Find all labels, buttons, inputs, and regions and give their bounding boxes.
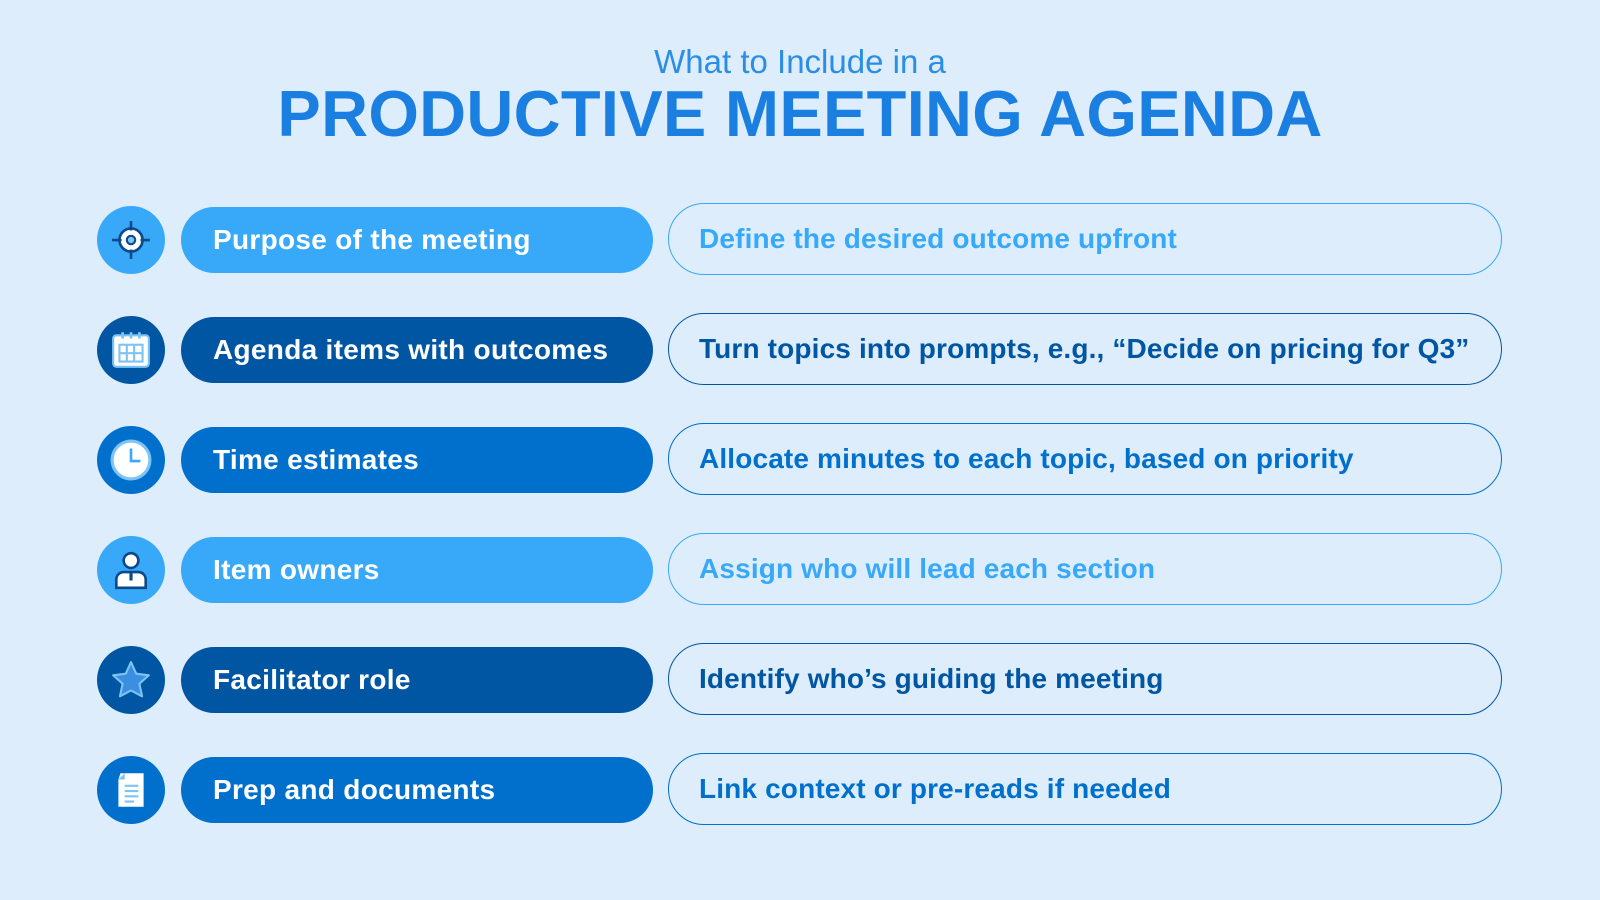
label pill <box>181 317 653 383</box>
label pill <box>181 757 653 823</box>
description pill: Turn topics into prompts, e.g., “Decide on pricing for Q3” <box>699 333 1469 364</box>
description pill <box>668 643 1502 715</box>
subtitle: What to Include in a <box>654 43 946 80</box>
icon: target <box>97 206 165 274</box>
description pill <box>668 203 1502 275</box>
description pill: Allocate minutes to each topic, based on priority <box>699 443 1354 474</box>
title: PRODUCTIVE MEETING AGENDA <box>277 77 1323 150</box>
icon: person <box>97 536 165 604</box>
icon: clock <box>97 426 165 494</box>
icon: document <box>97 756 165 824</box>
row: facilitator <box>97 643 1502 715</box>
label pill: Facilitator role <box>213 664 411 695</box>
description pill <box>668 753 1502 825</box>
description pill <box>668 423 1502 495</box>
label pill <box>181 647 653 713</box>
description pill <box>668 313 1502 385</box>
row: prep <box>97 753 1502 825</box>
description pill: Define the desired outcome upfront <box>699 223 1177 254</box>
label pill: Agenda items with outcomes <box>213 334 608 365</box>
icon: star <box>97 646 165 714</box>
description pill: Link context or pre-reads if needed <box>699 773 1171 804</box>
row: time <box>97 423 1502 495</box>
label pill: Prep and documents <box>213 774 495 805</box>
icon: calendar <box>97 316 165 384</box>
label pill <box>181 427 653 493</box>
label pill: Item owners <box>213 554 380 585</box>
label pill: Purpose of the meeting <box>213 224 531 255</box>
row: purpose <box>97 203 1502 275</box>
label pill <box>181 207 653 273</box>
description pill <box>668 533 1502 605</box>
description pill: Identify who’s guiding the meeting <box>699 663 1164 694</box>
label pill <box>181 537 653 603</box>
row: agenda items <box>97 313 1502 385</box>
label pill: Time estimates <box>213 444 419 475</box>
description pill: Assign who will lead each section <box>699 553 1155 584</box>
row: owners <box>97 533 1502 605</box>
